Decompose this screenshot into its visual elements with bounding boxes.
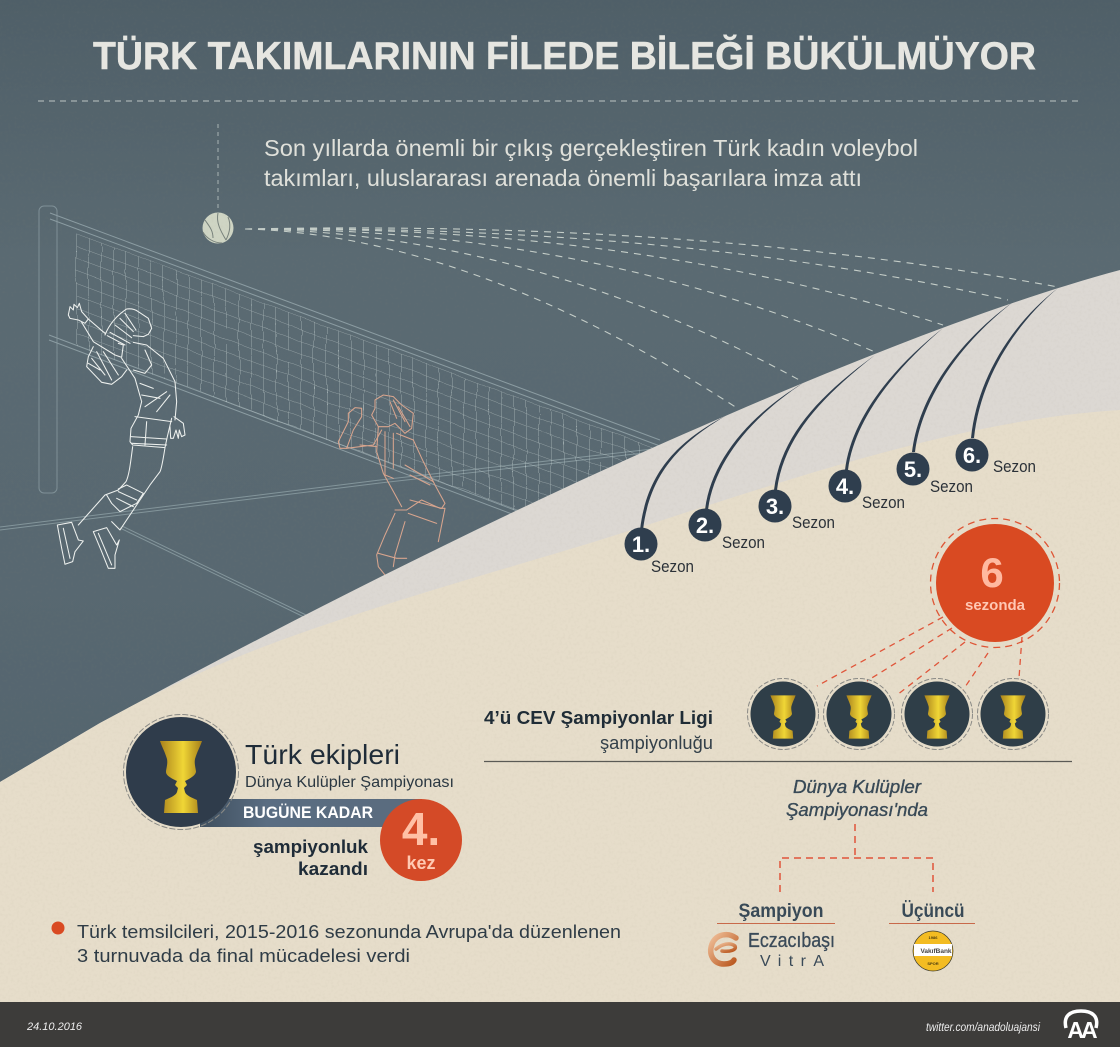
champion text: şampiyonluk: [253, 837, 369, 857]
illustration: jumping player: [57, 303, 185, 568]
logo: VakıfBank: SPOR: [927, 961, 939, 966]
heading: Club World Championship: Dünya Kulüpler: [793, 776, 922, 797]
intro text: Son yıllarda önemli bir çıkış gerçekleştiren Türk kadın voleybol: [264, 135, 918, 161]
trophy 3: [902, 678, 972, 750]
callout: 6 sezonda: sezonda: [965, 597, 1026, 614]
ball drop guide: [217, 124, 219, 210]
text: CEV Champions League titles: şampiyonluğu: [600, 733, 713, 753]
band label: BUGÜNE KADAR: [243, 803, 373, 822]
third place label: Üçüncü: [902, 901, 964, 922]
beige ground: [0, 410, 1120, 1047]
logo: Eczacıbaşı VitrA: VitrA: [760, 953, 824, 970]
logo: VakıfBank: VakıfBank: [920, 948, 952, 955]
season 5: Sezon: [930, 478, 973, 496]
season 1: 1.: [632, 532, 650, 557]
callout: 6 sezonda: [930, 518, 1060, 648]
volleyball net: [0, 206, 670, 617]
divider: [484, 760, 1072, 762]
logo: VakıfBank: 1986: [929, 935, 938, 940]
heading: Türk ekipleri: [245, 739, 400, 770]
summary band: [200, 799, 422, 827]
date: 24.10.2016: [26, 1021, 83, 1033]
volleyball: [202, 212, 234, 244]
season 1: [624, 528, 694, 576]
season 2: Sezon: [722, 534, 765, 552]
trophy 4: [978, 678, 1048, 750]
season 3: 3.: [766, 494, 784, 519]
text: CEV Champions League titles: [484, 708, 713, 753]
intro text: takımları, uluslararası arenada önemli başarılara imza attı: [264, 165, 862, 191]
champion text: [253, 837, 369, 879]
grey curved band: [0, 270, 1120, 1047]
title divider: [38, 100, 1082, 102]
trophy 2: [824, 678, 894, 750]
season 5: [896, 452, 973, 496]
title: TÜRK TAKIMLARININ FİLEDE BİLEĞİ BÜKÜLMÜYOR: [93, 34, 1036, 78]
note with bullet: Türk temsilcileri, 2015-2016 sezonunda Avrupa'da düzenlenen: [77, 921, 621, 942]
champion label: Şampiyon: [738, 901, 824, 922]
logo: AA: [1065, 1011, 1097, 1043]
callout connectors to trophies: [817, 617, 1022, 695]
logo: Eczacıbaşı VitrA: Eczacıbaşı: [748, 930, 835, 952]
season 3: Sezon: [792, 514, 835, 532]
red badge: kez: [406, 853, 436, 873]
season markers: [624, 438, 1036, 576]
season 6: 6.: [963, 443, 981, 468]
season 6: [956, 438, 1036, 476]
logo: Eczacıbaşı VitrA: [711, 930, 835, 970]
season 5: 5.: [904, 457, 922, 482]
big trophy badge: [124, 714, 238, 830]
bracket connector: [780, 824, 933, 892]
callout: 6 sezonda: 6: [980, 549, 1004, 596]
text: CEV Champions League titles: 4’ü CEV Şampiyonlar Ligi: [484, 708, 713, 728]
illustration: opposing player: [338, 395, 445, 575]
season 4: [828, 470, 905, 512]
subheading: Dünya Kulüpler Şampiyonası: [245, 774, 454, 791]
logo: VakıfBank: [913, 931, 953, 971]
season 3: [758, 490, 835, 532]
champion text: kazandı: [298, 859, 368, 879]
note with bullet: [52, 921, 621, 966]
season 6: Sezon: [993, 458, 1036, 476]
social handle: twitter.com/anadoluajansi: [926, 1022, 1040, 1034]
intro text: [264, 135, 918, 191]
logo: AA: AA: [1067, 1017, 1097, 1043]
season 1: Sezon: [651, 558, 694, 576]
season 4: 4.: [836, 474, 854, 499]
season 2: 2.: [696, 513, 714, 538]
ball trajectories: [245, 228, 1058, 408]
season connector curves: [640, 288, 1058, 530]
red badge: 4.: [402, 803, 440, 855]
heading: Club World Championship: [786, 776, 928, 820]
season 4: Sezon: [862, 494, 905, 512]
panel: Turkish teams summary: [124, 714, 462, 881]
note with bullet: 3 turnuvada da final mücadelesi verdi: [77, 945, 410, 966]
trophies: CEV Champions League: [748, 678, 1048, 750]
trophy 1: [748, 678, 818, 750]
heading: Club World Championship: Şampiyonası'nda: [786, 799, 928, 820]
footer bar: [0, 1002, 1120, 1047]
season 2: [688, 508, 765, 552]
red badge: [380, 799, 462, 881]
